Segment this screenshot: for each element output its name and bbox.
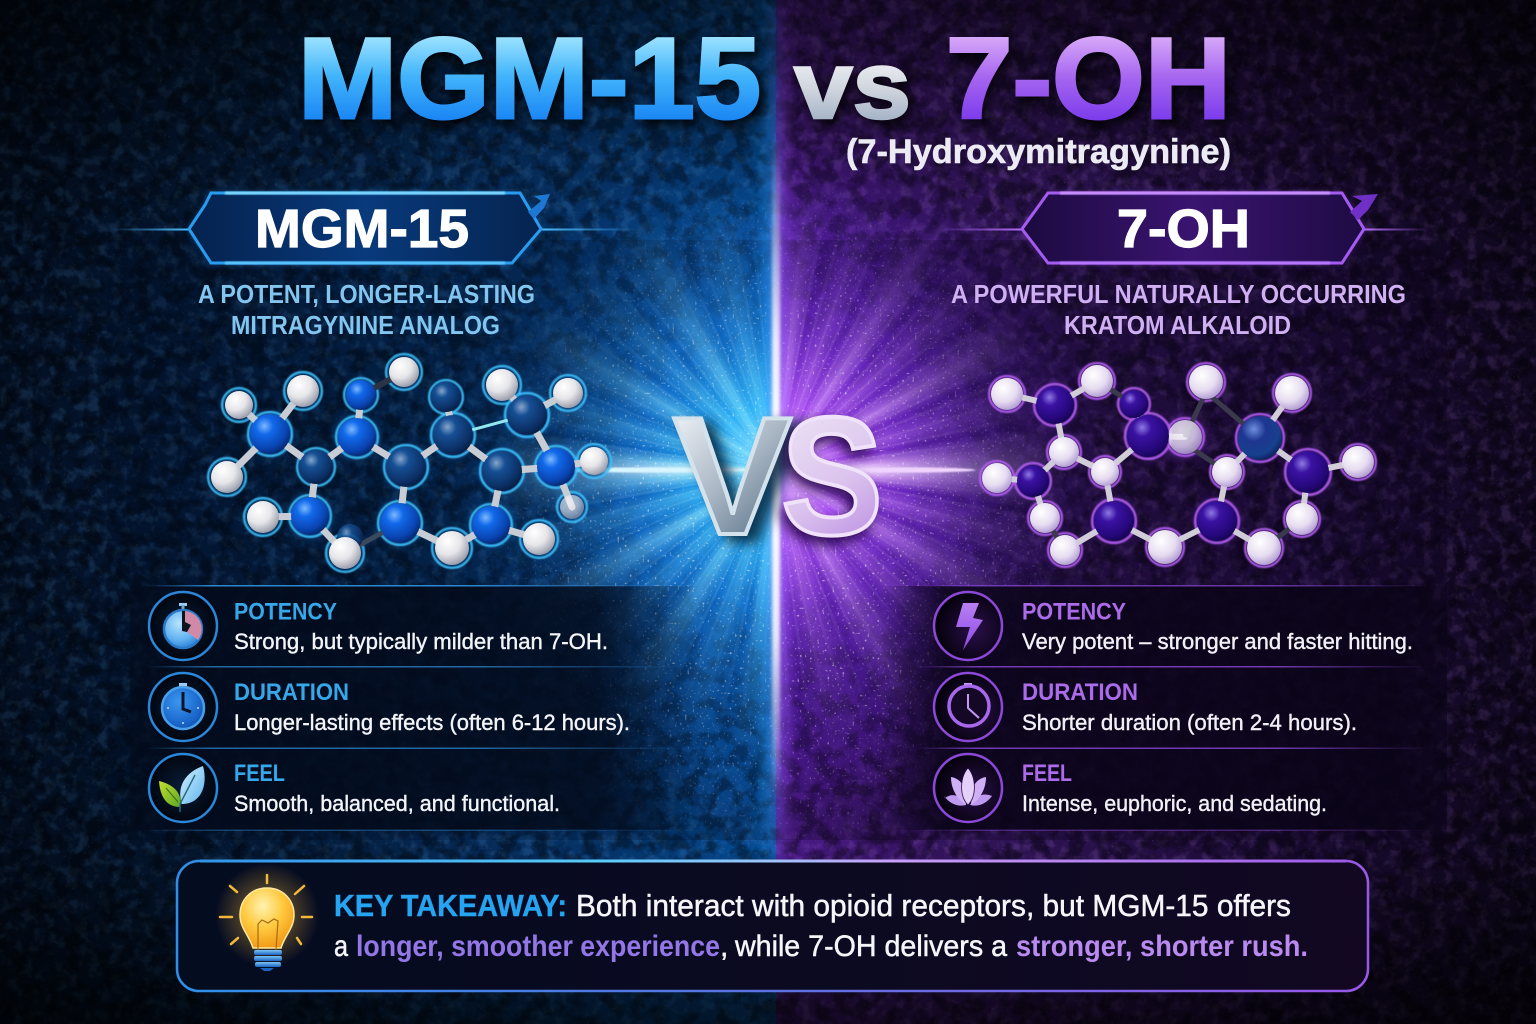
text: takeaway line 2: stronger, shorter rush.	[1016, 930, 1308, 963]
subtitle: 7-OH: KRATOM ALKALOID	[1064, 310, 1291, 340]
VS emblem: V	[673, 382, 792, 570]
heading: duration: DURATION	[234, 679, 349, 706]
panel: 7-OH	[880, 192, 1447, 831]
title	[298, 15, 1236, 171]
row: duration	[149, 673, 630, 741]
row: duration	[934, 673, 1357, 741]
text: potency: Very potent – stronger and faster hitting.	[1022, 629, 1413, 654]
text: duration: Shorter duration (often 2-4 hours).	[1022, 710, 1357, 735]
VS emblem: S	[778, 388, 878, 578]
heading: potency: POTENCY	[1022, 598, 1126, 626]
row: potency	[934, 592, 1413, 660]
title shadow: MGM-15	[301, 19, 766, 149]
text: duration: Longer-lasting effects (often 6-12 hours).	[234, 710, 630, 735]
center sparks and seam	[460, 0, 1092, 860]
icon: leaves	[149, 754, 217, 822]
title shadow: 7-OH	[949, 19, 1236, 149]
badge: 7-OH: 7-OH	[1117, 199, 1250, 259]
icon: lightning bolt	[934, 592, 1002, 660]
molecule: MGM-15	[208, 354, 611, 572]
text: takeaway line 1: Both interact with opioid receptors, but MGM-15 offers	[576, 888, 1291, 923]
VS emblem: V	[683, 388, 803, 578]
text: feel: Intense, euphoric, and sedating.	[1022, 791, 1327, 816]
row: feel	[934, 754, 1327, 822]
subtitle: 7-OH: A POWERFUL NATURALLY OCCURRING	[951, 279, 1406, 309]
heading: potency: POTENCY	[234, 598, 337, 626]
text: takeaway line 2	[334, 930, 1308, 963]
row: feel	[149, 754, 560, 822]
text: feel: Smooth, balanced, and functional.	[234, 791, 560, 816]
title shadow	[301, 19, 1236, 149]
decorative rays: purple burst	[780, 207, 1054, 719]
title: 7-OH: 7-OH	[946, 15, 1231, 143]
badge: MGM-15	[110, 192, 640, 264]
text: takeaway line 2: a	[334, 930, 348, 963]
icon: light bulb	[215, 863, 319, 971]
text: takeaway line 2: while 7-OH delivers a	[734, 930, 1007, 963]
badge: 7-OH	[935, 192, 1430, 264]
callout: key takeaway	[177, 860, 1368, 991]
title: MGM-15: MGM-15	[298, 15, 761, 143]
subtitle: MGM-15: MITRAGYNINE ANALOG	[231, 310, 500, 340]
subtitle: MGM-15	[198, 279, 535, 340]
heading: feel: FEEL	[1022, 760, 1072, 787]
subtitle: 7-OH	[951, 279, 1406, 340]
VS emblem: S	[781, 382, 883, 570]
subtitle: MGM-15: A POTENT, LONGER-LASTING	[198, 279, 535, 309]
rows: MGM-15	[130, 585, 700, 831]
icon: lotus	[934, 754, 1002, 822]
molecule: 7-OH	[980, 363, 1376, 567]
title shadow: vs	[797, 38, 916, 145]
rows: 7-OH	[880, 585, 1447, 831]
icon: stopwatch	[934, 673, 1002, 741]
VS emblem	[673, 382, 883, 578]
icon: clock	[149, 673, 217, 741]
text: takeaway line 2: longer, smoother experience	[356, 930, 720, 963]
row: potency	[149, 592, 608, 660]
title: full name: (7-Hydroxymitragynine)	[846, 133, 1231, 171]
text: takeaway line 2: ,	[720, 930, 728, 963]
decorative rays: blue burst	[506, 222, 772, 732]
text: potency: Strong, but typically milder than 7-OH.	[234, 629, 608, 654]
badge: MGM-15: MGM-15	[255, 199, 469, 259]
title: vs: vs	[794, 32, 911, 139]
heading: duration: DURATION	[1022, 679, 1138, 706]
icon: stopwatch	[149, 592, 217, 660]
panel: MGM-15	[110, 192, 700, 831]
text: takeaway line 1: KEY TAKEAWAY:	[334, 888, 567, 923]
heading: feel: FEEL	[234, 760, 285, 787]
